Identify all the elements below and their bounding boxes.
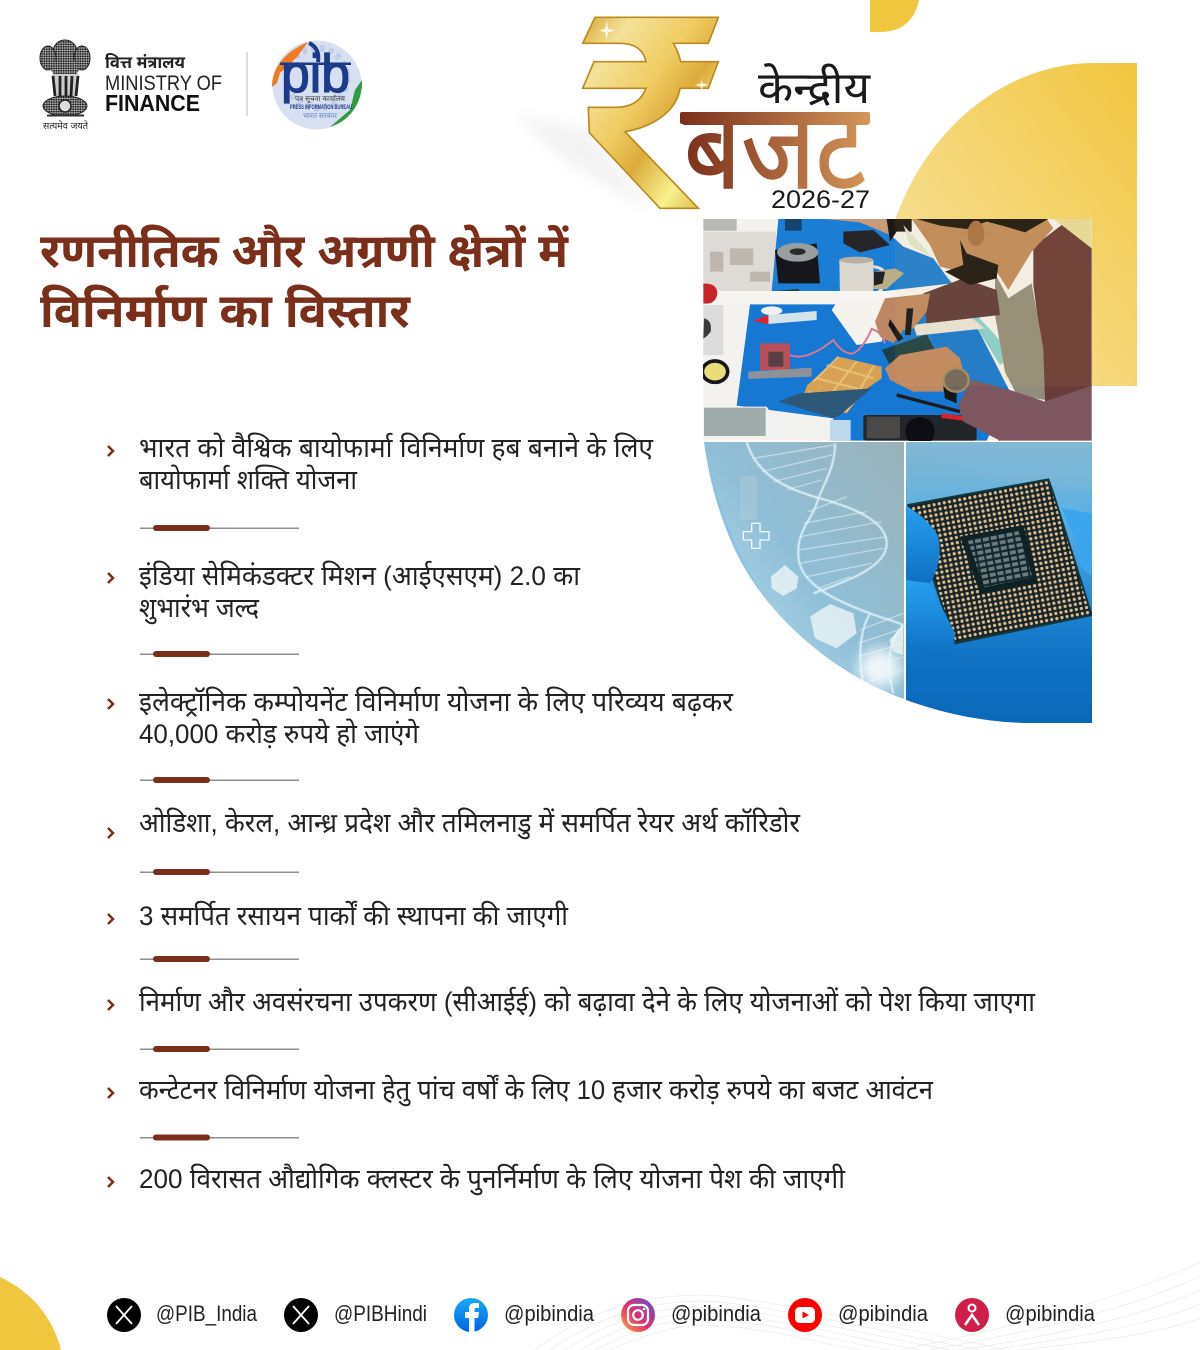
photo: DNA helix panel: [704, 442, 904, 702]
divider 4: [140, 869, 299, 875]
text: ministry name: FINANCE: [105, 90, 200, 116]
social: YouTube: [788, 1298, 929, 1332]
icon: national emblem: [40, 40, 90, 132]
decor: bottom-left yellow shape: [0, 1277, 61, 1350]
text: ministry name: MINISTRY OF: [105, 72, 222, 95]
header: Ministry of Finance logo: [40, 40, 222, 132]
decor: yellow rounded panel behind photo: [880, 63, 1137, 386]
item 3: 40,000 करोड़ रुपये हो जाएंगे: [139, 718, 420, 749]
heading: रणनीतिक और अग्रणी क्षेत्रों में: [40, 224, 569, 277]
icon: PIB logo: PRESS INFORMATION BUREAU: [290, 104, 352, 111]
item 1: बायोफार्मा शक्ति योजना: [139, 464, 358, 495]
photo: technician repairing electronics: [702, 219, 1093, 446]
divider 5: [140, 956, 299, 962]
decor: footer wave lines: [535, 1262, 1200, 1350]
icon: plus: [743, 523, 769, 548]
heading: [40, 224, 569, 337]
item 1: भारत को वैश्विक बायोफार्मा विनिर्माण हब बनाने के लिए: [139, 432, 654, 463]
icon: hexagons: [771, 565, 903, 655]
social: Instagram: @pibindia: [671, 1301, 762, 1326]
chip die: [960, 525, 1038, 593]
footer social handles: [107, 1298, 1096, 1332]
text: ministry name: वित्त मंत्रालय: [105, 52, 186, 72]
chip: [908, 479, 1092, 643]
icon: PIB logo: [272, 40, 362, 130]
divider 2: [140, 651, 299, 657]
budget logo: [520, 17, 872, 214]
item 4: ओडिशा, केरल, आन्ध्र प्रदेश और तमिलनाडु में समर्पित रेयर अर्थ कॉरिडोर: [139, 807, 801, 840]
icon: PIB logo: pib: [281, 44, 350, 104]
icon: national emblem: सत्यमेव जयते: [43, 120, 89, 132]
item 2: इंडिया सेमिकंडक्टर मिशन (आईएसएम) 2.0 का: [139, 560, 581, 591]
divider 3: [140, 777, 299, 783]
item 3: इलेक्ट्रॉनिक कम्पोयनेंट विनिर्माण योजना के लिए परिव्यय बढ़कर: [139, 686, 734, 717]
divider 1: [140, 525, 299, 531]
text: kendriya: केन्द्रीय: [758, 62, 872, 113]
item 2: [108, 560, 581, 625]
item 3: [108, 686, 734, 749]
icon: PIB logo: पत्र सूचना कार्यालय: [295, 94, 346, 104]
divider 6: [140, 1046, 299, 1052]
item 2: शुभारंभ जल्द: [139, 593, 260, 625]
text: bajat: बजट: [684, 83, 868, 213]
text: ministry name: [105, 52, 222, 116]
social: Facebook: [454, 1298, 595, 1332]
white separator: [703, 441, 1092, 443]
social: Instagram: [621, 1298, 762, 1332]
social: Facebook: @pibindia: [504, 1301, 595, 1326]
social: X PIBHindi: [284, 1298, 427, 1332]
social: X PIB_India: @PIB_India: [156, 1301, 258, 1326]
social: YouTube: @pibindia: [838, 1301, 929, 1326]
man: [1053, 219, 1092, 250]
heading: विनिर्माण का विस्तार: [40, 284, 411, 337]
bullet list: [108, 432, 1036, 1196]
text: year: 2026-27: [771, 186, 870, 214]
decor: top yellow shape: [870, 0, 919, 32]
item 8: 200 विरासत औद्योगिक क्लस्टर के पुनर्निर्माण के लिए योजना पेश की जाएगी: [139, 1163, 846, 1196]
item 5: 3 समर्पित रसायन पार्कों की स्थापना की जाएगी: [139, 900, 569, 931]
social: Koo: @pibindia: [1005, 1301, 1096, 1326]
photo: microchip panel: [905, 442, 1092, 724]
divider 7: [140, 1134, 299, 1140]
rupee shadow: [520, 115, 650, 207]
item 1: [108, 432, 654, 495]
item 6: निर्माण और अवसंरचना उपकरण (सीआईई) को बढ़ावा देने के लिए योजनाओं को पेश किया जाएगा: [139, 986, 1036, 1017]
icon: gold rupee symbol: [583, 17, 718, 208]
social: Koo: [955, 1298, 1096, 1332]
glove: [905, 505, 1092, 656]
divider: [246, 52, 248, 116]
item 7: कन्टेटनर विनिर्माण योजना हेतु पांच वर्षों के लिए 10 हजार करोड़ रुपये का बजट आवंटन: [139, 1074, 934, 1107]
social: X PIBHindi: @PIBHindi: [334, 1301, 427, 1326]
icon: PIB logo: भारत सरकार: [303, 111, 338, 120]
social: X PIB_India: [107, 1298, 258, 1332]
yellow tint over photo: [895, 219, 1092, 386]
